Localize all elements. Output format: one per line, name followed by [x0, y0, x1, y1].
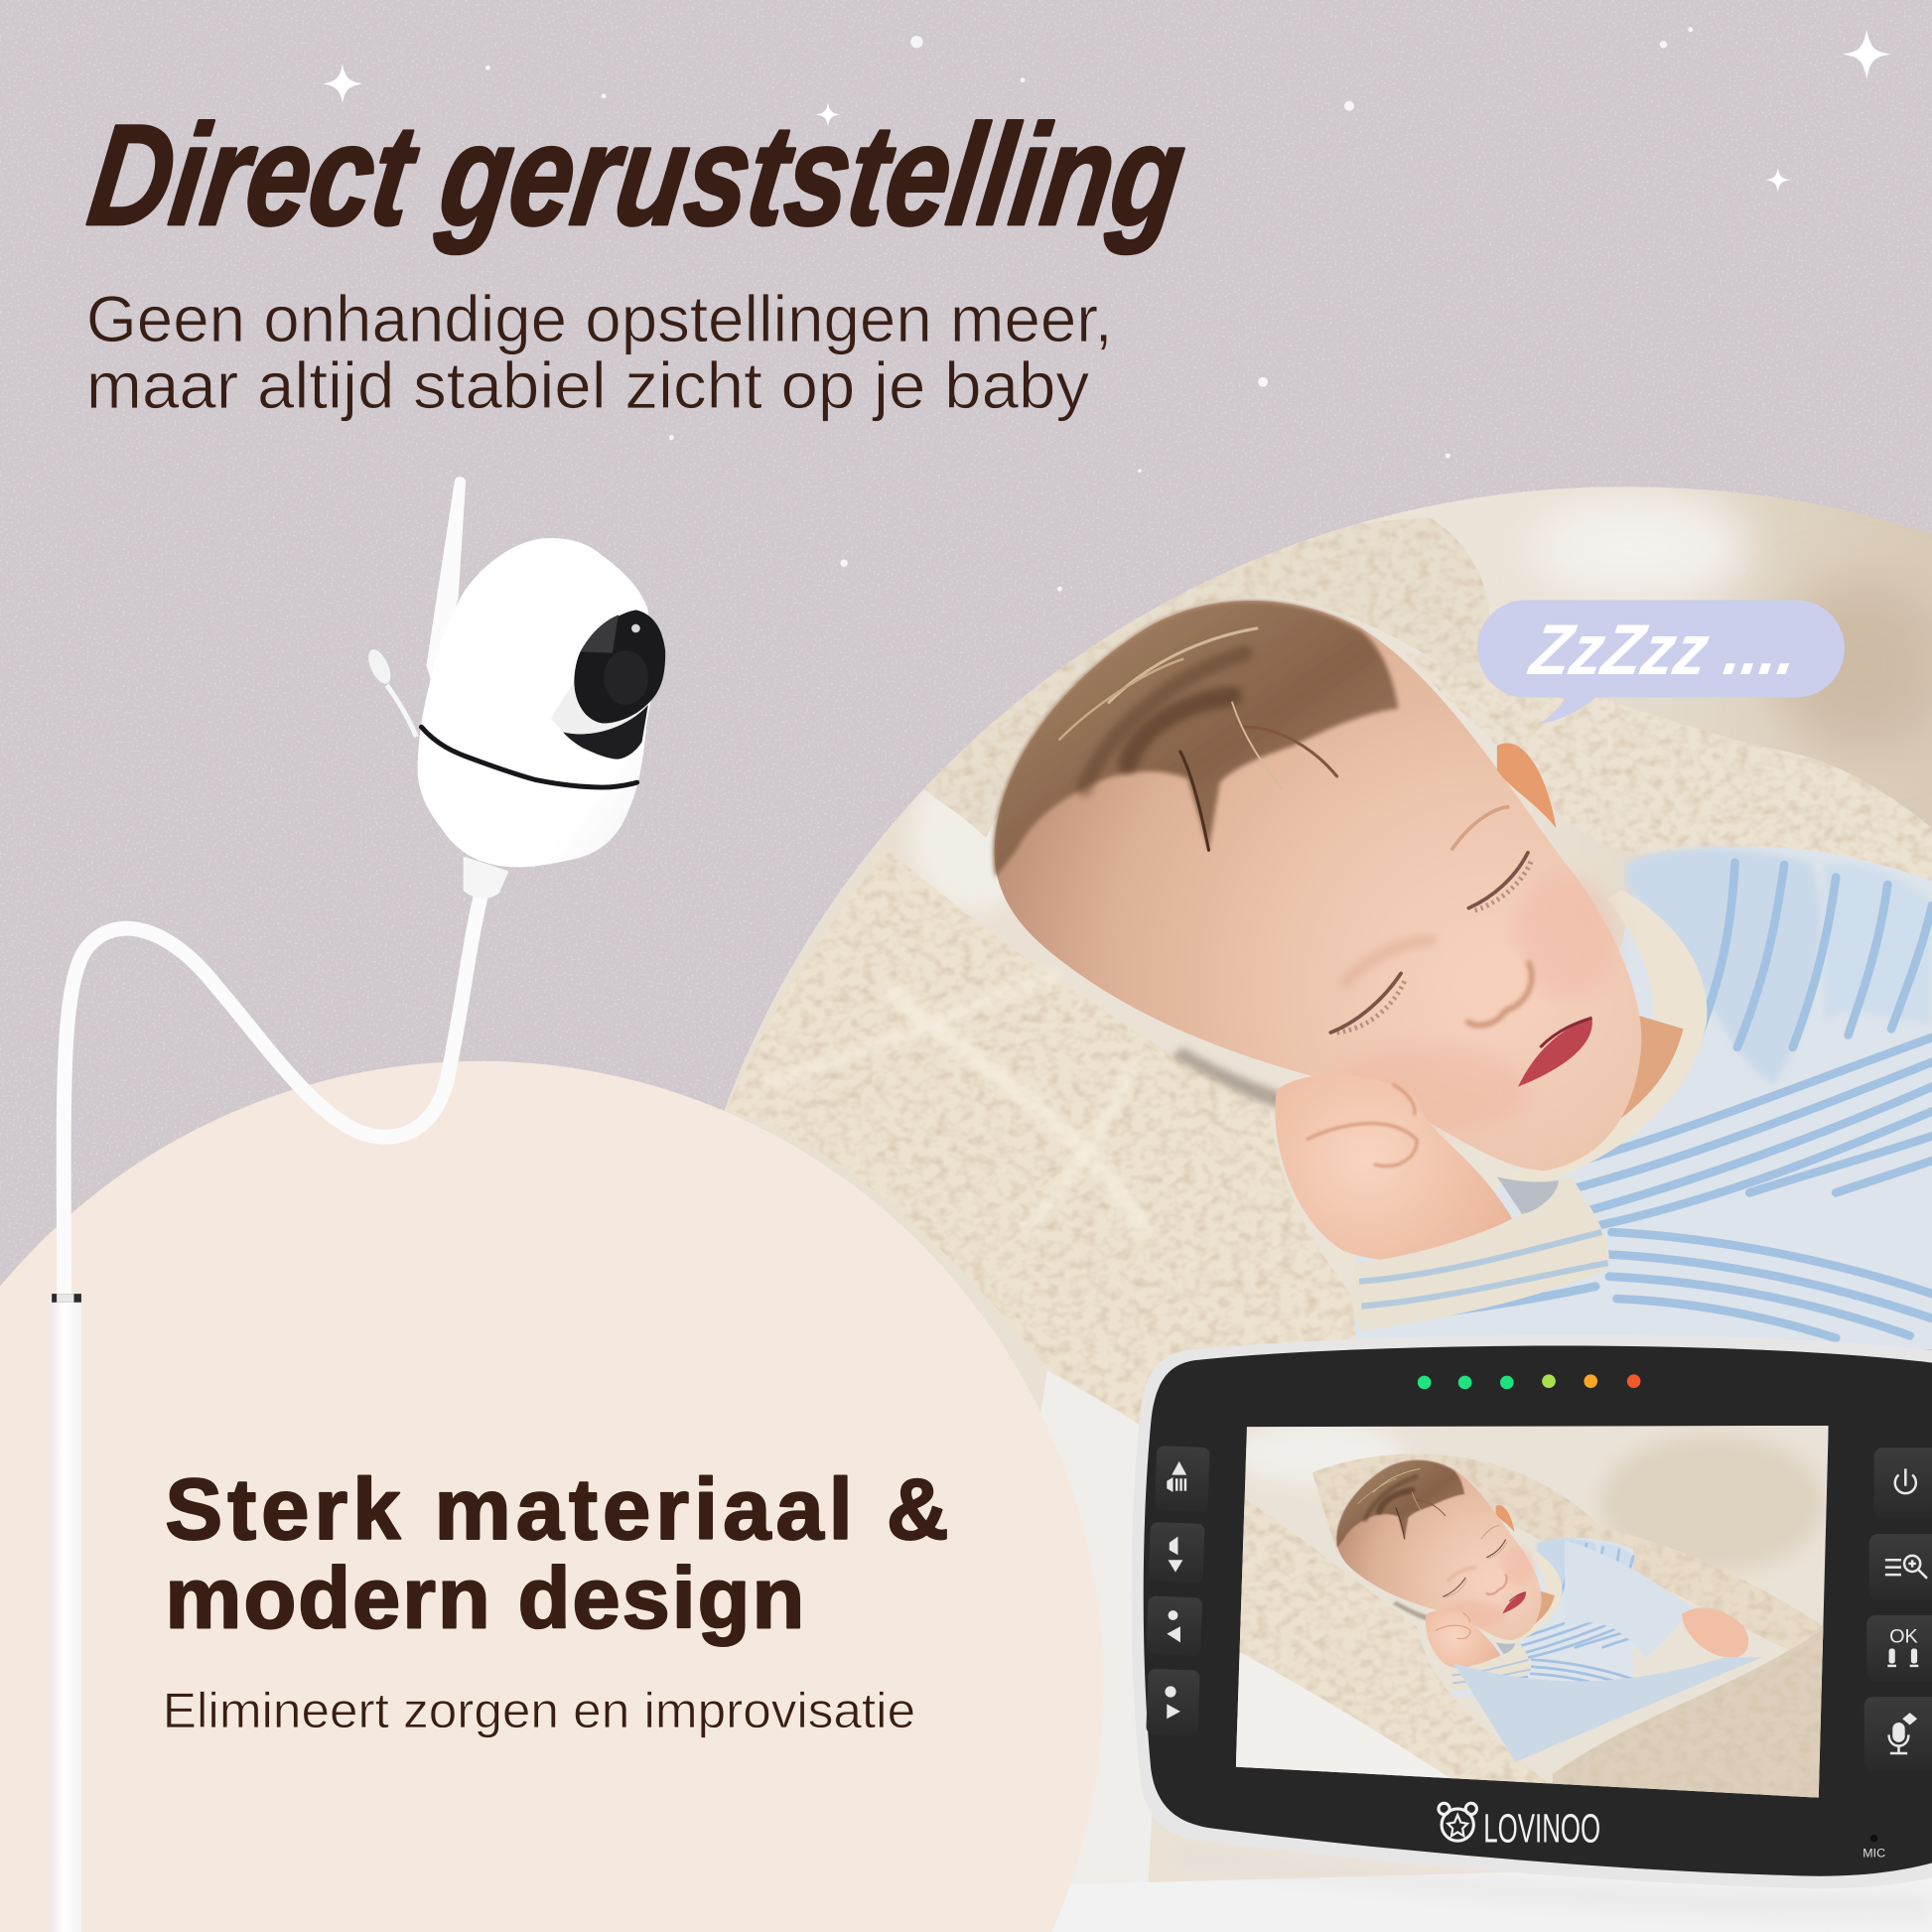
star: [1765, 168, 1790, 193]
subtitle: Geen onhandige opstellingen meer,: [86, 282, 1113, 355]
lens: [574, 610, 665, 724]
right buttons: [1864, 1448, 1932, 1770]
body band: [421, 727, 637, 787]
camera body: [418, 538, 653, 867]
monitor face: [1144, 1346, 1932, 1876]
connector: [464, 857, 509, 898]
power icon: [1895, 1468, 1916, 1493]
signal LEDs: [1418, 1374, 1640, 1389]
photo: sleeping baby: [664, 481, 1932, 1932]
background: [0, 0, 1932, 1355]
antennas: [426, 477, 466, 685]
cable and pole: [52, 897, 481, 1932]
lens housing: [563, 705, 648, 759]
mic label: MIC: [1863, 1846, 1885, 1860]
knitted blankets: [727, 517, 1932, 1448]
microphone icon: [1889, 1713, 1917, 1753]
video monitor: [1132, 1334, 1932, 1916]
heading: strong material: Sterk materiaal &: [165, 1461, 949, 1558]
monitor frame: [1132, 1334, 1932, 1888]
brand logo: [1439, 1803, 1600, 1851]
title: Direct geruststelling: [80, 95, 1193, 255]
brand logo: LOVINOO: [1483, 1805, 1600, 1851]
pole: [52, 1294, 81, 1932]
white sheet: [1040, 1370, 1152, 1884]
star: [816, 102, 840, 127]
subtitle: maar altijd stabiel zicht op je baby: [86, 348, 1089, 422]
screen: baby arm: [1565, 1540, 1694, 1657]
cream panel: [0, 1061, 1103, 1932]
star: [1842, 30, 1891, 78]
OK label: OK: [1889, 1625, 1919, 1647]
blurred bedding backdrop: [911, 492, 1932, 911]
star: [323, 65, 362, 103]
heading: strong material: modern design: [165, 1550, 804, 1646]
camera: [364, 477, 665, 898]
monitor shadow: [1171, 1849, 1932, 1916]
body text: Elimineert zorgen en improvisatie: [163, 1683, 915, 1738]
speech bubble: [1477, 600, 1845, 724]
zoom icon: [1885, 1556, 1927, 1579]
bubble text: ZzZzz ....: [1523, 610, 1804, 690]
screen: [1232, 1423, 1829, 1798]
left buttons: [1146, 1446, 1210, 1735]
baby: [994, 601, 1932, 1349]
mic label: [1863, 1835, 1885, 1860]
